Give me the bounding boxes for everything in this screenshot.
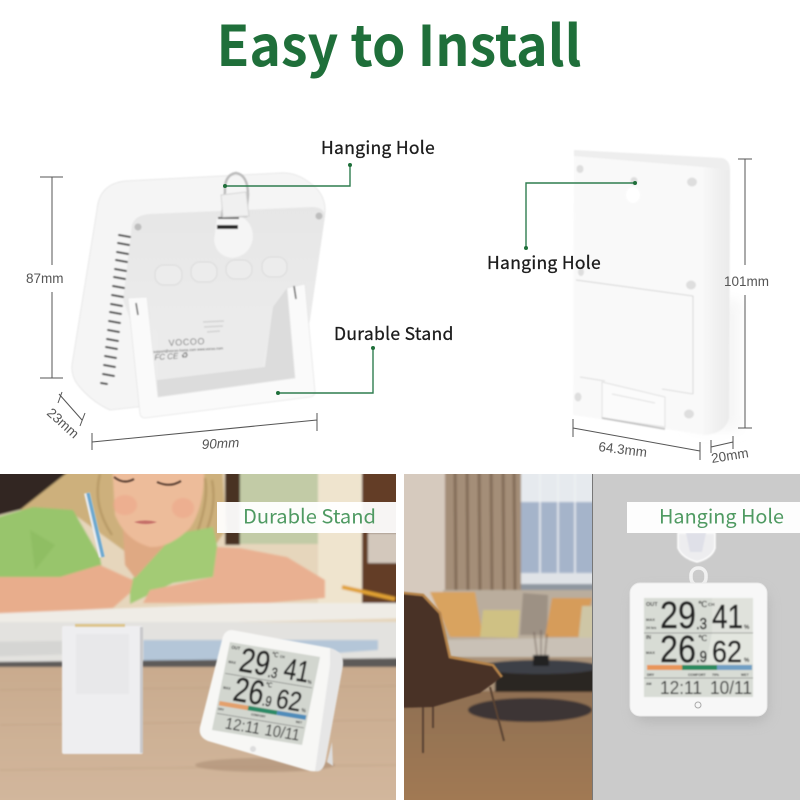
thermometer display on table: WET	[295, 720, 303, 725]
thermometer display on table: 62	[273, 683, 304, 718]
callout: hanging hole left	[223, 135, 435, 188]
thermometer display on table: %	[307, 679, 313, 686]
product back view with stand	[72, 173, 325, 418]
eyes and mouth	[87, 477, 181, 557]
thermometer display on table: DRY	[218, 707, 224, 712]
shadows	[195, 758, 335, 772]
lcd readings: CH	[708, 602, 714, 607]
sensor side	[703, 167, 730, 435]
white sensor	[62, 624, 143, 754]
hanging hole	[214, 216, 253, 258]
lcd readings: COMFORT	[688, 673, 707, 677]
dimension 23mm	[44, 392, 85, 441]
dimension 101mm: 101mm	[724, 274, 769, 289]
folded stand	[602, 382, 665, 427]
dimension 20mm	[710, 436, 750, 466]
label: hanging hole: Hanging Hole	[659, 500, 784, 530]
mounting holes	[574, 165, 697, 418]
chair	[395, 592, 504, 753]
neck	[123, 530, 168, 578]
device body	[72, 173, 325, 410]
dimension 101mm	[724, 159, 769, 428]
thermometer display on table: %	[301, 708, 307, 715]
lcd readings: 24 hrs	[646, 626, 656, 630]
lcd readings: OUT	[646, 602, 658, 608]
sofa seat	[448, 637, 592, 656]
lcd readings: 70%	[712, 673, 720, 677]
thermometer display on table: ℃	[265, 681, 273, 690]
curtain	[445, 460, 521, 592]
thermometer display on table: ℃	[271, 651, 279, 659]
battery cover	[157, 307, 273, 380]
brand text: support@vocoo-home.com www.vocoo.com	[153, 346, 223, 354]
lcd readings: MAX	[646, 650, 655, 655]
thermometer display on table: MAX	[228, 660, 237, 665]
dimension 64.3mm	[573, 419, 700, 460]
lcd readings: %	[744, 625, 750, 631]
right arm	[143, 547, 325, 603]
sensor shadow	[690, 300, 740, 430]
dimension 20mm: 20mm	[710, 445, 750, 466]
window	[520, 501, 592, 574]
stand slots	[136, 286, 296, 315]
display frame	[630, 583, 767, 716]
button	[695, 702, 701, 708]
label: durable stand: Durable Stand	[243, 500, 376, 530]
dimension 87mm: 87mm	[26, 271, 64, 286]
orange pencil	[342, 587, 395, 599]
display shadow	[634, 590, 768, 722]
lcd readings: DRY	[647, 673, 655, 677]
shirt left sleeve	[0, 507, 104, 582]
adhesive hook	[678, 533, 715, 562]
thermometer display on table: 41	[281, 653, 312, 690]
label: hanging hole	[627, 500, 800, 533]
thermometer display on table: .3	[267, 663, 279, 681]
hair	[20, 474, 226, 551]
shirt body	[130, 527, 218, 604]
lcd readings: .9	[696, 649, 707, 666]
blue cap	[368, 605, 408, 615]
screw holes	[134, 212, 322, 230]
thermometer display on table: MAX	[223, 686, 232, 691]
sensor top edge	[574, 150, 730, 170]
thermometer display on table: 10/11	[263, 722, 301, 745]
keyhole	[626, 187, 640, 203]
thermometer display on table: 26	[230, 671, 268, 713]
callout: hanging hole right: Hanging Hole	[487, 250, 601, 275]
label: durable stand	[217, 500, 397, 533]
callout: hanging hole left: Hanging Hole	[321, 135, 435, 160]
desk papers	[0, 600, 396, 623]
lcd readings: 10/11	[710, 678, 752, 698]
dimension 64.3mm: 64.3mm	[598, 439, 648, 460]
table	[0, 667, 420, 800]
books	[0, 621, 396, 663]
lcd readings: 12:11	[660, 678, 702, 698]
thermometer display on table: 12:11	[223, 715, 262, 738]
thermometer display on table: OUT	[231, 645, 241, 651]
thermometer display on table: 29	[236, 641, 274, 684]
coffee table	[495, 670, 607, 692]
brand text: VOCOO	[168, 336, 205, 348]
lcd readings: 41	[712, 598, 743, 635]
hanging ring	[691, 568, 706, 585]
panel: grey wall with hanging display	[592, 474, 800, 800]
dimension 90mm	[92, 413, 317, 452]
lcd readings: IN	[646, 635, 651, 641]
lcd readings: 29	[660, 595, 696, 637]
brand text: EP FC CE ♻	[142, 351, 189, 363]
buttons	[155, 257, 287, 285]
lcd readings: MAX	[646, 617, 655, 622]
pencil	[87, 493, 102, 557]
thermometer display on table: .9	[261, 692, 273, 710]
left arm	[0, 565, 133, 614]
vent slots	[101, 235, 130, 384]
hanging hook	[222, 173, 248, 216]
dark recess behind stand	[157, 288, 295, 397]
lcd readings: AM	[646, 682, 652, 686]
lcd readings: 26	[660, 629, 696, 671]
lcd readings: ℃	[698, 600, 707, 609]
callout: durable stand: Durable Stand	[334, 321, 454, 346]
sofa back	[443, 590, 608, 642]
rug ring	[468, 698, 592, 722]
callout: durable stand	[276, 321, 454, 395]
lcd readings: WET	[741, 673, 750, 677]
face	[112, 474, 205, 548]
lcd readings: ℃	[698, 634, 707, 643]
sensor back view	[573, 150, 740, 435]
thermometer display on table	[200, 630, 343, 771]
photo: girl at desk	[0, 460, 420, 800]
lcd readings: %	[744, 658, 750, 664]
sensor body	[573, 150, 730, 435]
dimension 23mm: 23mm	[44, 405, 82, 441]
battery cover outline	[576, 280, 693, 394]
vase	[533, 655, 549, 666]
dimension 87mm	[26, 177, 64, 378]
battery arrow	[203, 321, 224, 332]
stand frame	[128, 284, 315, 418]
brand text	[142, 336, 223, 363]
photo: living room	[404, 474, 592, 800]
thermometer display on table: COMFORT	[251, 712, 266, 719]
lcd readings: .3	[696, 616, 707, 633]
callout: hanging hole right	[487, 181, 637, 275]
lcd readings	[644, 595, 753, 698]
lcd readings: 62	[712, 634, 742, 669]
thermometer display on table: CH	[280, 655, 286, 660]
dimension 90mm: 90mm	[201, 435, 240, 452]
title: Easy to Install	[216, 2, 582, 83]
back panel	[123, 207, 325, 397]
floor	[404, 690, 592, 800]
cushions	[430, 592, 483, 637]
floor top strip	[454, 656, 592, 691]
